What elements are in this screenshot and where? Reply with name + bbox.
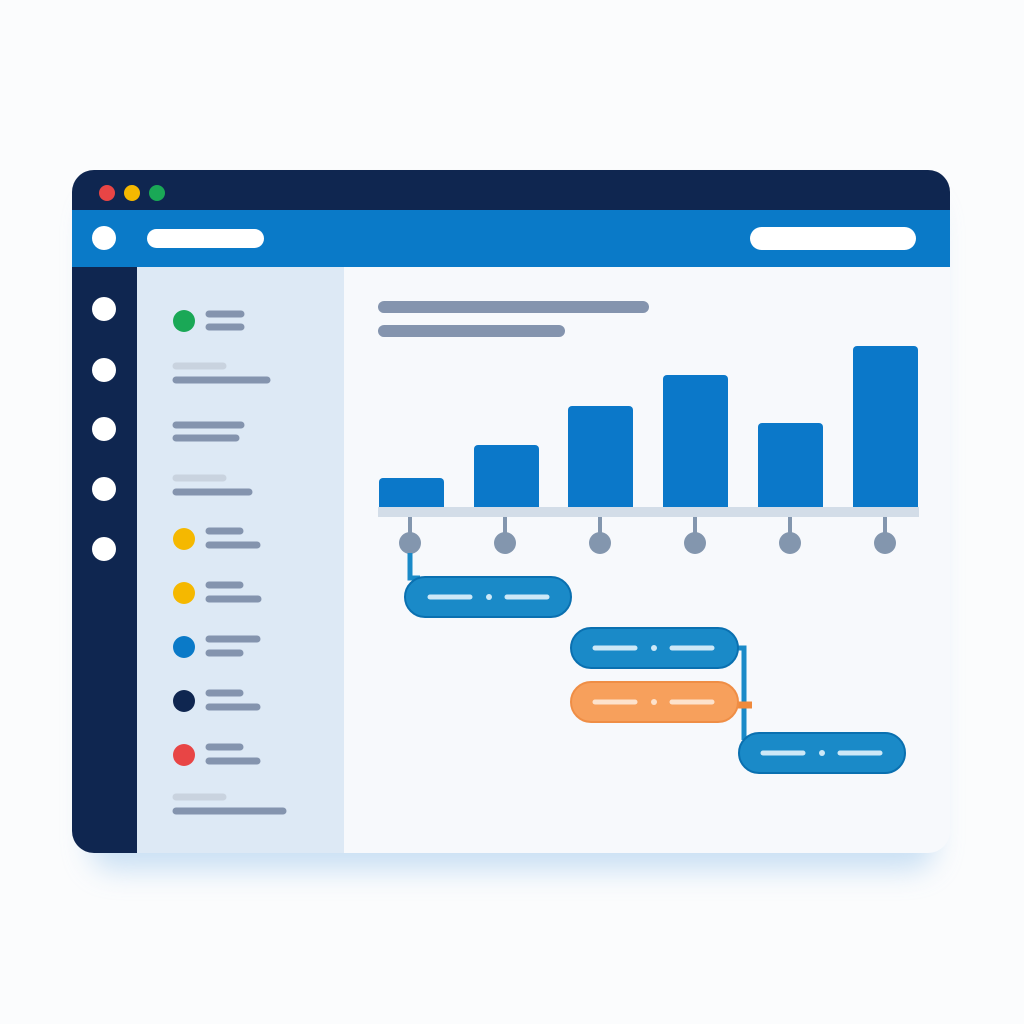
gantt connectors — [410, 553, 752, 740]
icon rail — [72, 267, 137, 853]
bar chart — [378, 346, 919, 517]
gantt pills — [405, 577, 905, 773]
heading lines — [384, 307, 643, 331]
title bar — [72, 170, 950, 210]
toolbar — [72, 210, 950, 267]
window shadow — [90, 200, 935, 870]
sidebar list — [137, 267, 344, 853]
timeline markers — [399, 517, 896, 554]
browser window — [72, 170, 950, 853]
